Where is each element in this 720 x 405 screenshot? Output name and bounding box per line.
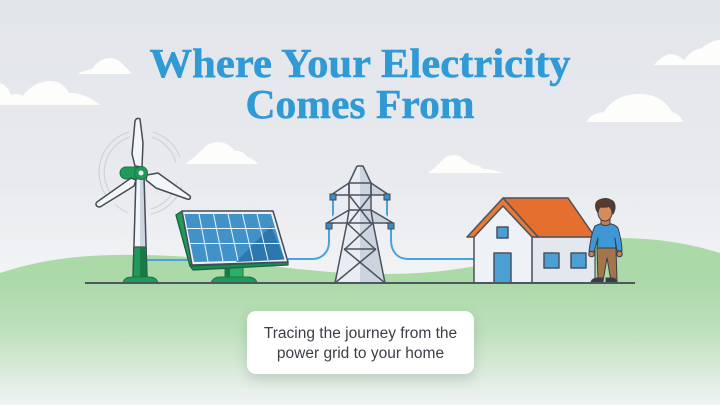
door: [494, 253, 511, 283]
solar panel: [176, 211, 288, 283]
person: [589, 199, 622, 283]
signal rings: [99, 132, 182, 214]
title: [150, 40, 571, 127]
wind turbine: [96, 118, 190, 283]
ground line: [85, 282, 635, 284]
caption box: power grid to your home: [277, 344, 444, 362]
windows: [544, 253, 559, 268]
green hills: [0, 238, 720, 405]
caption box: Tracing the journey from the: [264, 325, 457, 342]
house: [467, 198, 595, 283]
title: Where Your Electricity: [150, 40, 571, 86]
caption box: [247, 311, 474, 374]
transmission tower: [327, 166, 393, 283]
clouds: [0, 40, 720, 173]
insulators: [326, 194, 394, 229]
title: Comes From: [246, 81, 474, 127]
gable window: [497, 227, 508, 238]
power cables: [147, 198, 474, 260]
